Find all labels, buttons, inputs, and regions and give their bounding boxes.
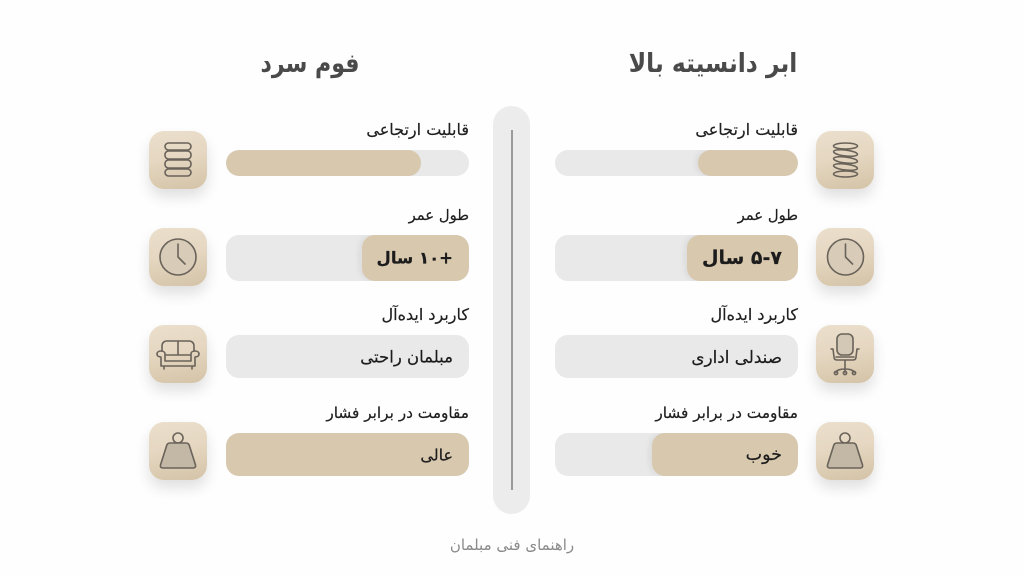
label: ideal use: کاربرد ایده‌آل: [711, 305, 798, 324]
bar: lifespan: +۱۰ سال: [377, 248, 453, 268]
label: pressure resistance: مقاومت در برابر فشار: [326, 404, 469, 422]
bar: lifespan: [226, 235, 469, 281]
bar: pressure resistance: عالی: [420, 445, 453, 464]
center divider: [493, 106, 530, 514]
panel: high density foam column: [555, 120, 878, 492]
icon: compressed spring: [149, 131, 207, 189]
icon: office chair: [816, 325, 874, 383]
icon: spring: [816, 131, 874, 189]
icon: weight: [149, 422, 207, 480]
bar: pressure resistance: [555, 433, 798, 476]
icon: clock: [149, 228, 207, 286]
bar: pressure resistance: [226, 433, 469, 476]
bar: ideal use: مبلمان راحتی: [360, 347, 453, 366]
bar: resilience: [226, 150, 469, 176]
panel: cold foam column: [145, 120, 470, 492]
label: lifespan: طول عمر: [738, 207, 798, 224]
label: lifespan: طول عمر: [409, 207, 469, 224]
heading: cold foam: فوم سرد: [261, 49, 360, 79]
icon: clock: [816, 228, 874, 286]
footer caption: راهنمای فنی مبلمان: [450, 536, 574, 554]
bar: ideal use: صندلی اداری: [691, 346, 782, 366]
bar: ideal use: [226, 335, 469, 378]
bar: lifespan: ۵-۷ سال: [702, 247, 782, 269]
label: pressure resistance: مقاومت در برابر فشار: [655, 404, 798, 422]
label: resilience: قابلیت ارتجاعی: [366, 120, 469, 139]
label: resilience: قابلیت ارتجاعی: [695, 120, 798, 139]
label: ideal use: کاربرد ایده‌آل: [382, 305, 469, 324]
bar: lifespan: [555, 235, 798, 281]
bar: ideal use: [555, 335, 798, 378]
bar: pressure resistance: خوب: [746, 444, 782, 464]
icon: sofa: [149, 325, 207, 383]
heading: high density foam: ابر دانسیته بالا: [628, 49, 797, 79]
bar: resilience: [555, 150, 798, 176]
icon: weight: [816, 422, 874, 480]
